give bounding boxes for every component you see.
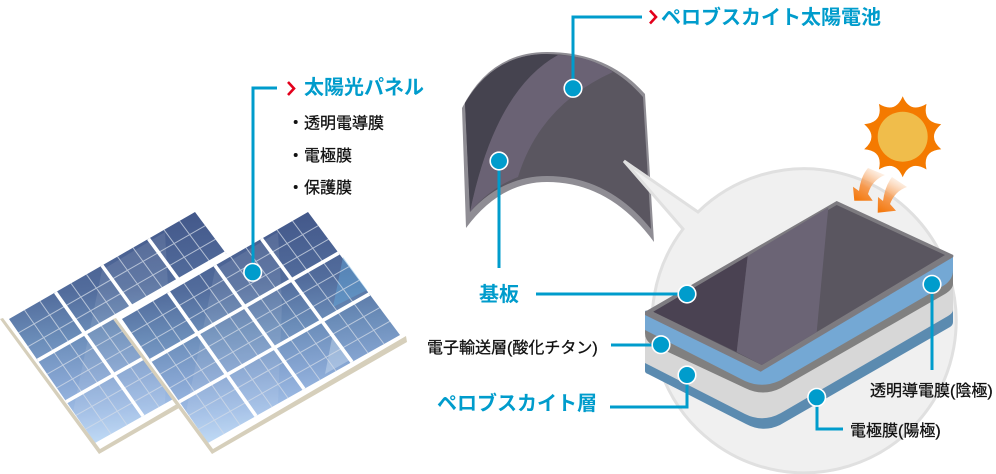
back solar panel <box>0 207 294 454</box>
connector: solar panel label <box>253 88 277 272</box>
list: solar panel films: 保護膜 <box>304 179 352 197</box>
label: transparent conductive film (cathode): 透明導電膜(陰極) <box>870 381 993 400</box>
connector: substrate on curved cell <box>498 161 500 268</box>
connector: substrate <box>536 292 687 296</box>
list: solar panel films <box>294 114 384 197</box>
substrate top face <box>653 205 945 365</box>
dark left section of top face <box>653 256 748 352</box>
connector: perovskite solar cell label <box>573 17 642 88</box>
electron transport layer: dark grey <box>645 255 953 392</box>
magnifier callout bubble <box>624 161 956 473</box>
connector: electrode film <box>817 397 843 429</box>
substrate top border <box>645 201 953 372</box>
connector: electron transport layer <box>611 344 661 346</box>
solar panels illustration <box>0 207 407 454</box>
label: electrode film (anode): 電極膜(陽極) <box>850 422 941 440</box>
marker dots <box>244 80 941 406</box>
list: solar panel films: 電極膜 <box>304 147 352 165</box>
connector: transparent conductive film <box>930 284 934 370</box>
label: electron transport layer: 電子輸送層(酸化チタン) <box>427 339 598 357</box>
icon: sunlight arrows <box>853 168 907 213</box>
heading: solar panel: 太陽光パネル <box>304 76 424 99</box>
layered cell cross-section <box>645 201 953 429</box>
front solar panel <box>113 207 407 454</box>
connector: perovskite layer <box>610 375 687 407</box>
list: solar panel films: 透明電導膜 <box>304 114 384 132</box>
transparent conductive layer: blue <box>645 255 953 385</box>
electrode layer: steel blue <box>645 255 953 429</box>
heading: perovskite solar cell: ペロブスカイト太陽電池 <box>661 5 881 29</box>
light reflection stripe of top face <box>737 208 828 365</box>
label: substrate: 基板 <box>479 283 519 306</box>
icon: sun <box>864 96 941 177</box>
perovskite layer: light grey <box>645 255 953 418</box>
label: perovskite layer: ペロブスカイト層 <box>437 391 597 415</box>
flexible perovskite solar cell <box>462 52 654 242</box>
